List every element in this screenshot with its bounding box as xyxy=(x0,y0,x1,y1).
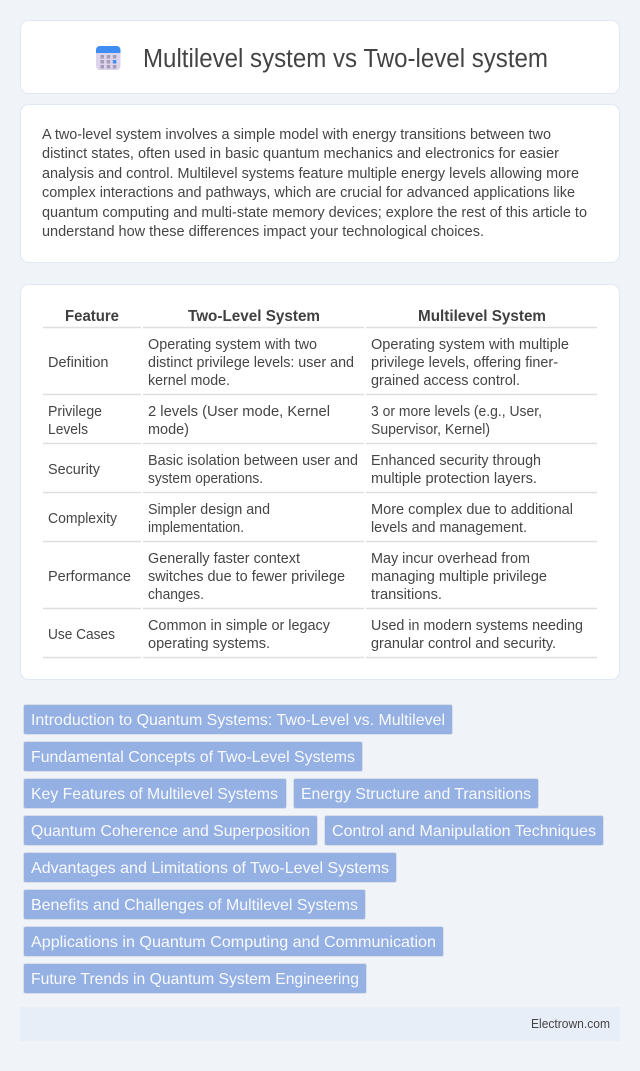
topic tags xyxy=(24,704,604,994)
row: Performance: Generally faster context xyxy=(148,551,300,567)
table header row: Multilevel System xyxy=(418,308,546,325)
tag: fundamental concepts xyxy=(24,742,362,772)
intro paragraph: A two-level system involves a simple model with energy transitions between two xyxy=(42,127,551,143)
row: Privilege Levels: Levels xyxy=(48,422,88,438)
intro paragraph: understand how these differences impact your technological choices. xyxy=(42,224,484,240)
tag: advantages xyxy=(24,852,396,882)
table header row: Two-Level System xyxy=(188,308,320,325)
row: Definition: Definition xyxy=(48,355,108,371)
tag: future trends xyxy=(24,964,366,994)
row: Privilege Levels: 3 or more levels (e.g., User, xyxy=(371,404,542,420)
row: Complexity: Simpler design and xyxy=(148,502,270,518)
row: Definition: Operating system with multiple xyxy=(371,337,569,353)
row: Use Cases: Use Cases xyxy=(48,627,115,643)
row: Security: Security xyxy=(48,462,101,478)
row: Performance: switches due to fewer privilege xyxy=(148,569,345,585)
tag: energy structure xyxy=(294,778,538,808)
intro paragraph xyxy=(42,127,587,240)
row: Use Cases xyxy=(43,618,597,658)
table header row xyxy=(43,308,597,328)
row: Performance xyxy=(43,551,597,608)
tag: advantages: Advantages and Limitations of Two-Level Systems xyxy=(31,860,389,877)
icon: calendar grid xyxy=(96,46,120,70)
row: Definition: Operating system with two xyxy=(148,337,317,353)
row: Performance: changes. xyxy=(148,587,204,603)
row: Performance: May incur overhead from xyxy=(371,551,530,567)
row: Performance: transitions. xyxy=(371,587,442,603)
tag: coherence xyxy=(24,816,318,846)
tag: introduction xyxy=(24,704,452,734)
row: Privilege Levels: Privilege xyxy=(48,404,102,420)
tag: benefits: Benefits and Challenges of Multilevel Systems xyxy=(31,897,358,914)
row: Security: multiple protection layers. xyxy=(371,471,537,487)
intro paragraph: distinct states, often used in basic quantum mechanics and electronics for easier xyxy=(42,146,559,162)
row: Complexity: implementation. xyxy=(148,520,244,536)
row: Performance: Performance xyxy=(48,569,131,585)
row: Security xyxy=(43,453,597,492)
row: Definition: kernel mode. xyxy=(148,373,230,389)
row: Complexity: Complexity xyxy=(48,511,118,527)
title: Multilevel system vs Two-level system xyxy=(143,45,548,73)
row: Privilege Levels: mode) xyxy=(148,422,189,438)
intro paragraph: complex interactions and pathways, which are crucial for advanced applications like xyxy=(42,185,575,201)
row: Use Cases: Common in simple or legacy xyxy=(148,618,331,634)
tag: key features: Key Features of Multilevel Systems xyxy=(31,786,278,803)
row: Security: Basic isolation between user and xyxy=(148,453,358,469)
row: Privilege Levels xyxy=(43,404,597,444)
row: Performance: managing multiple privilege xyxy=(371,569,547,585)
header panel xyxy=(20,20,620,94)
row: Complexity: levels and management. xyxy=(371,520,527,536)
row: Security: Enhanced security through xyxy=(371,453,541,469)
row: Definition xyxy=(43,337,597,394)
row: Complexity: More complex due to additional xyxy=(371,502,573,518)
tag: control xyxy=(324,816,604,846)
row: Complexity xyxy=(43,502,597,542)
panel: comparison table xyxy=(20,284,620,680)
tag: fundamental concepts: Fundamental Concepts of Two-Level Systems xyxy=(31,749,355,766)
row: Use Cases: Used in modern systems needing xyxy=(371,618,583,634)
tag: benefits xyxy=(24,890,366,920)
tag: coherence: Quantum Coherence and Superposition xyxy=(31,823,310,840)
tag: energy structure: Energy Structure and Transitions xyxy=(301,786,531,803)
row: Use Cases: granular control and security. xyxy=(371,636,556,652)
row: Use Cases: operating systems. xyxy=(148,636,270,652)
tag: key features xyxy=(24,778,286,808)
table header row: Feature xyxy=(65,308,119,325)
tag: future trends: Future Trends in Quantum System Engineering xyxy=(31,971,359,988)
row: Definition: distinct privilege levels: user and xyxy=(148,355,354,371)
footer: Electrown.com xyxy=(531,1017,610,1031)
row: Privilege Levels: Supervisor, Kernel) xyxy=(371,422,490,438)
tag: applications: Applications in Quantum Computing and Communication xyxy=(31,934,436,951)
tag: control: Control and Manipulation Techniques xyxy=(332,823,596,840)
row: Definition: privilege levels, offering finer- xyxy=(371,355,558,371)
intro paragraph: analysis and control. Multilevel systems feature multiple energy levels allowing more xyxy=(42,166,579,182)
intro paragraph: quantum computing and multi-state memory devices; explore the rest of this article to xyxy=(42,205,587,221)
row: Security: system operations. xyxy=(148,471,263,487)
row: Privilege Levels: 2 levels (User mode, Kernel xyxy=(148,404,330,420)
panel: introduction xyxy=(20,104,620,262)
row: Definition: grained access control. xyxy=(371,373,520,389)
tag: applications xyxy=(24,926,444,956)
footer xyxy=(20,1007,620,1041)
tag: introduction: Introduction to Quantum Systems: Two-Level vs. Multilevel xyxy=(31,712,445,729)
